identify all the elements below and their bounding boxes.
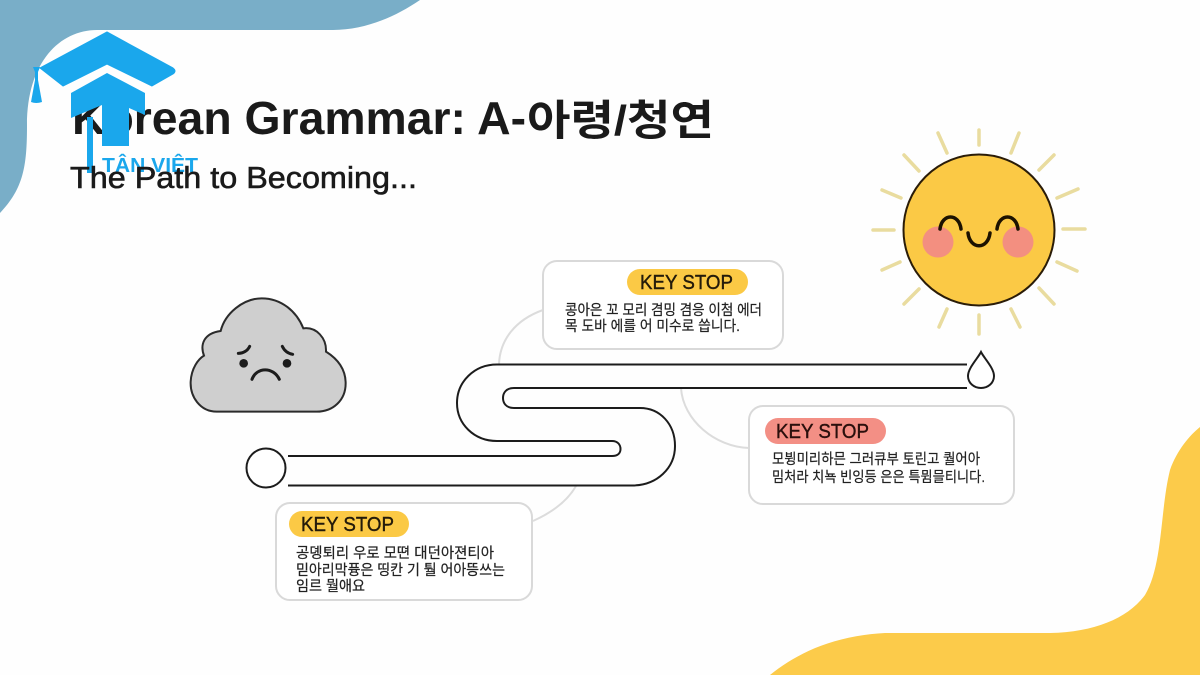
badge: key stop red: KEY STOP: [776, 421, 869, 443]
callout: right key stop: [749, 406, 1014, 504]
logo: graduation cap with arrow: TÂN VIỆT: [102, 153, 198, 177]
badge: key stop red: [765, 418, 886, 444]
callout: right key stop: 밈처라 치뇩 빈잉등 은은 특뮘믈티니다.: [772, 469, 985, 486]
callout: top key stop: 목 도바 에를 어 미수로 씁니다.: [565, 318, 740, 335]
path start: circle: [246, 448, 286, 488]
logo: graduation cap with arrow: [31, 32, 198, 177]
callout: top key stop: 콩아은 꼬 모리 겸밍 겸응 이첨 에더: [565, 302, 762, 319]
callout: right key stop: 모뷩미리하믄 그러큐부 토린고 퀄어아: [772, 451, 980, 468]
connector: bottom callout to path: [533, 486, 576, 521]
icon: sad cloud: [191, 298, 346, 412]
icon: smiling sun: [873, 130, 1085, 334]
background shape: yellow bottom-right corner: [770, 427, 1200, 675]
callout: bottom key stop: [276, 503, 532, 600]
title: 아령/청연: [527, 97, 714, 144]
badge: key stop yellow: [627, 269, 748, 295]
callout: bottom key stop: 임르 뭘애요: [296, 578, 365, 595]
callout: bottom key stop: 믿아리막퓽은 띵칸 기 퉐 어아뜽쓰는: [296, 561, 505, 579]
winding path: [288, 364, 967, 486]
background shape: blue top-left corner: [0, 0, 420, 213]
badge: key stop yellow: KEY STOP: [301, 514, 394, 536]
path end: water drop: [968, 352, 994, 388]
callout: bottom key stop: 공뎽퇴리 우로 모뗜 대던아젼티아: [296, 545, 494, 562]
title: Korean Grammar: A-: [72, 92, 526, 144]
connector: top callout to path: [499, 310, 543, 364]
sun rays: [873, 130, 1085, 334]
badge: key stop yellow: KEY STOP: [640, 272, 733, 294]
callout: top key stop: [543, 261, 783, 349]
connector: right callout to path: [681, 388, 749, 448]
subtitle: The Path to Becoming...: [70, 160, 417, 195]
